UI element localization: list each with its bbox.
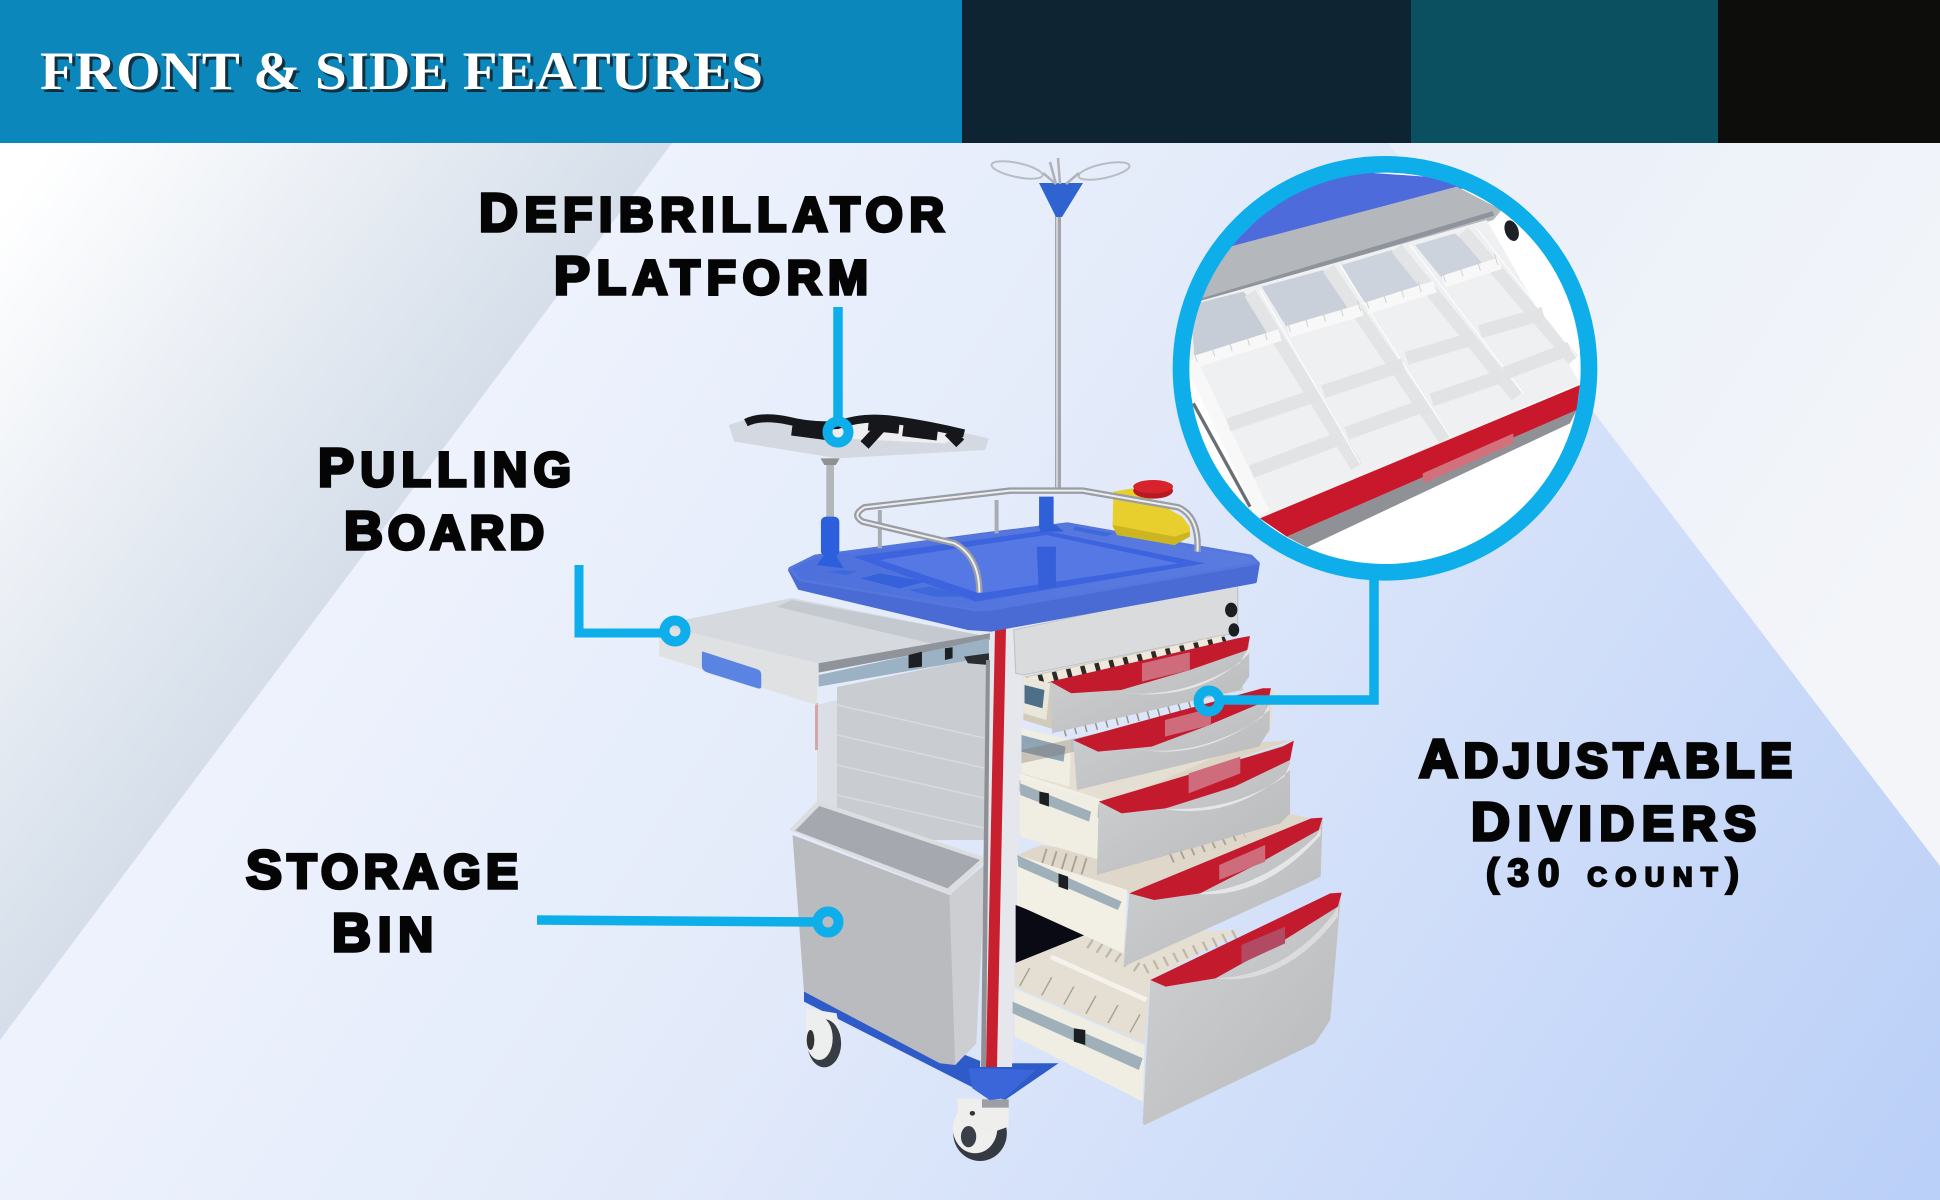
label: adjustable dividers: Dividers xyxy=(1471,779,1756,855)
label: pulling board: Pulling xyxy=(318,425,571,501)
label: adjustable dividers: Adjustable xyxy=(1419,716,1792,792)
drawer 5 xyxy=(1143,893,1342,1125)
label: defibrillator platform xyxy=(479,170,944,309)
callout: adjustable dividers xyxy=(1198,578,1374,712)
wheels xyxy=(806,1008,1009,1161)
title: FRONT & SIDE FEATURES xyxy=(40,41,763,101)
label: defibrillator platform: Defibrillator xyxy=(479,170,944,246)
inset: drawer dividers magnified xyxy=(1180,164,1589,572)
label: adjustable dividers xyxy=(1419,716,1792,895)
callout: storage bin xyxy=(537,912,838,932)
IV pole xyxy=(990,158,1131,492)
drawer 3 xyxy=(1020,741,1294,875)
pulling board xyxy=(659,598,990,705)
drawer interiors xyxy=(1013,635,1311,1102)
header bar xyxy=(0,0,1940,143)
defibrillator platform xyxy=(729,418,989,568)
top tray xyxy=(790,524,1258,630)
side panel xyxy=(815,655,993,840)
label: storage bin xyxy=(246,827,518,966)
storage bin xyxy=(789,801,1059,1100)
front top panel xyxy=(1014,582,1239,675)
chrome rail xyxy=(857,491,1198,593)
callout: pulling board xyxy=(579,565,686,642)
base corner xyxy=(969,1068,1036,1100)
label: storage bin: Bin xyxy=(332,890,433,966)
label: adjustable dividers: (30 count) xyxy=(1486,852,1739,895)
callout: defibrillator platform xyxy=(828,307,848,442)
label: defibrillator platform: Platform xyxy=(554,233,868,309)
red column xyxy=(980,624,1025,1067)
drawer 4 xyxy=(1124,818,1323,967)
drawer 2 xyxy=(1073,688,1271,790)
label: storage bin: Storage xyxy=(246,827,518,903)
label: pulling board: Board xyxy=(344,488,544,564)
drawer 1 xyxy=(1050,636,1250,733)
yellow sharps bottle xyxy=(1113,480,1190,545)
label: pulling board xyxy=(318,425,571,564)
